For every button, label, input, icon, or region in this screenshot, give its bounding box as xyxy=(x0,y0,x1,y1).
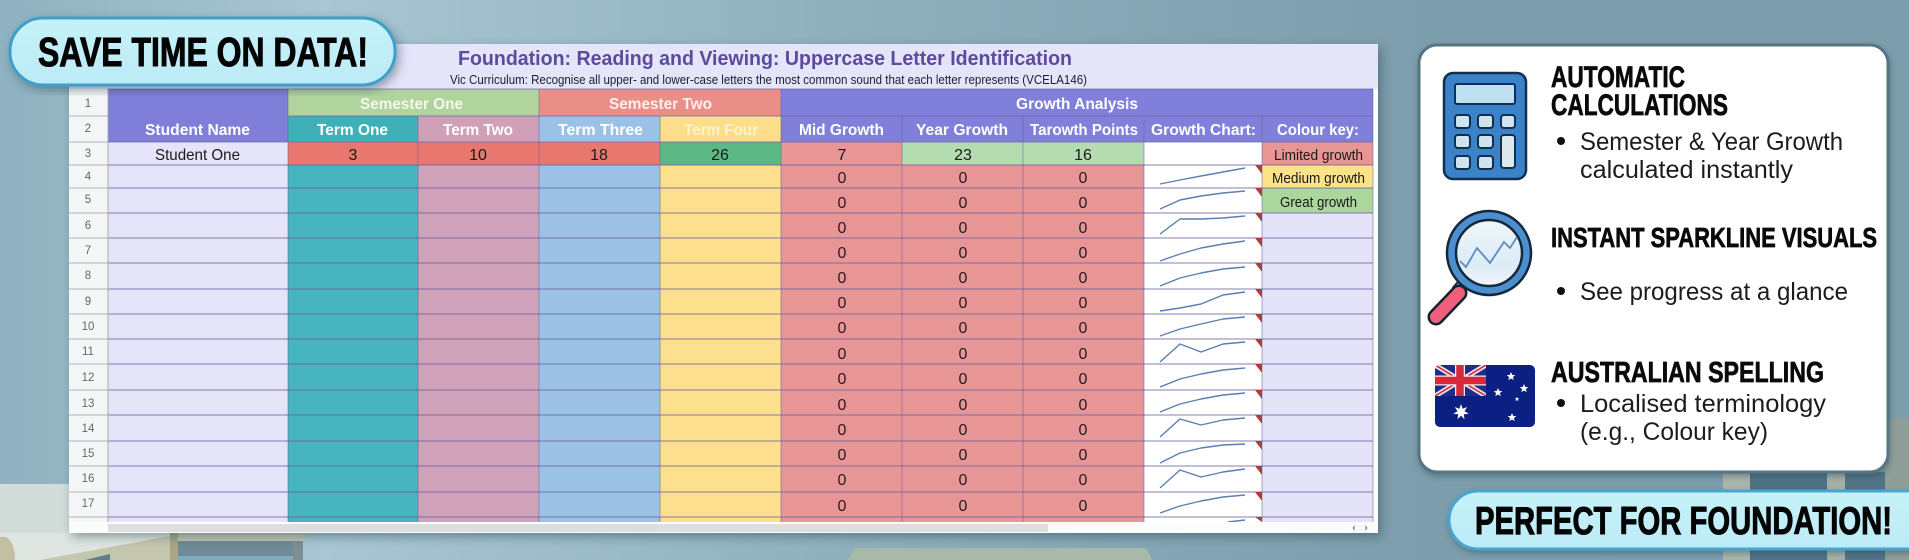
growth value zeros: 0 xyxy=(838,346,847,363)
growth value zeros: 0 xyxy=(959,220,968,237)
row number column: 4 xyxy=(85,171,92,183)
column fills xyxy=(108,142,1373,522)
sparklines column xyxy=(1160,165,1262,522)
header rows: Term Three xyxy=(558,122,643,139)
growth value zeros: 0 xyxy=(838,295,847,312)
growth value zeros: 0 xyxy=(959,422,968,439)
heading: australian spelling: AUSTRALIAN SPELLING xyxy=(1551,357,1824,389)
growth value zeros: 0 xyxy=(838,270,847,287)
growth value zeros: 0 xyxy=(838,447,847,464)
row number column: 3 xyxy=(85,148,91,160)
growth value zeros: 0 xyxy=(959,270,968,287)
row number column: 12 xyxy=(82,372,94,384)
colour key xyxy=(1262,142,1373,213)
student one data row: 26 xyxy=(711,147,729,164)
growth value zeros: 0 xyxy=(1079,498,1088,515)
growth value zeros: 0 xyxy=(838,397,847,414)
growth value zeros: 0 xyxy=(959,245,968,262)
row number column: 13 xyxy=(82,398,94,410)
callout: perfect for foundation xyxy=(1449,491,1909,549)
icon: calculator xyxy=(1444,73,1526,179)
header rows: Semester Two xyxy=(609,96,712,113)
growth value zeros: 0 xyxy=(1079,295,1088,312)
header rows xyxy=(108,89,1373,142)
growth value zeros: 0 xyxy=(959,498,968,515)
colour key: Limited growth xyxy=(1274,147,1363,164)
colour key: Great growth xyxy=(1280,194,1357,211)
growth value zeros: 0 xyxy=(959,170,968,187)
growth value zeros: 0 xyxy=(1079,270,1088,287)
bullet: semester and year growth: calculated instantly xyxy=(1580,156,1794,184)
student one data row: 16 xyxy=(1074,147,1092,164)
growth value zeros: 0 xyxy=(1079,346,1088,363)
student one data row xyxy=(155,142,1144,165)
sheet title band xyxy=(69,44,1378,89)
feature: instant sparkline visuals xyxy=(1551,222,1877,306)
panel: features xyxy=(1419,45,1888,472)
growth value zeros: 0 xyxy=(838,245,847,262)
growth value zeros: 0 xyxy=(838,472,847,489)
callout: save time on data xyxy=(10,18,395,85)
growth value zeros: 0 xyxy=(1079,245,1088,262)
growth value zeros: 0 xyxy=(838,220,847,237)
student one data row: 10 xyxy=(469,147,487,164)
header rows: Growth Chart: xyxy=(1151,122,1256,139)
header rows: Student Name xyxy=(145,122,250,139)
growth value zeros: 0 xyxy=(959,371,968,388)
growth value zeros: 0 xyxy=(959,447,968,464)
row number column: 14 xyxy=(82,423,95,435)
growth value zeros: 0 xyxy=(1079,371,1088,388)
growth value zeros: 0 xyxy=(1079,195,1088,212)
student one data row: 23 xyxy=(954,147,972,164)
header rows: Tarowth Points xyxy=(1030,122,1138,139)
row number column: 8 xyxy=(85,270,91,282)
growth value zeros: 0 xyxy=(1079,422,1088,439)
row number column: 10 xyxy=(82,321,94,333)
heading: automatic calculations: AUTOMATIC xyxy=(1551,61,1685,94)
header rows: Term Two xyxy=(443,122,513,139)
row number column: 17 xyxy=(82,498,94,510)
growth value zeros: 0 xyxy=(838,498,847,515)
icon: magnifying glass xyxy=(1436,211,1531,317)
row number column: 16 xyxy=(82,473,94,485)
growth value zeros: 0 xyxy=(1079,472,1088,489)
student one data row: 3 xyxy=(349,147,358,164)
row number column xyxy=(69,89,109,522)
student one data row: 7 xyxy=(838,147,847,164)
row number column: 1 xyxy=(85,98,91,110)
growth value zeros: 0 xyxy=(838,422,847,439)
row number column: 6 xyxy=(85,220,91,232)
icon: australian flag xyxy=(1435,365,1535,427)
student one data row: Student One xyxy=(155,147,240,164)
bullet: localised terminology: (e.g., Colour key) xyxy=(1580,418,1768,446)
growth value zeros: 0 xyxy=(959,346,968,363)
row number column: 9 xyxy=(85,296,91,308)
header rows: Year Growth xyxy=(916,122,1008,139)
header rows: Mid Growth xyxy=(799,122,884,139)
bullet: localised terminology xyxy=(1557,390,1827,446)
growth value zeros: 0 xyxy=(1079,170,1088,187)
heading: automatic calculations xyxy=(1551,61,1728,122)
row number column: 7 xyxy=(85,245,91,257)
growth value zeros: 0 xyxy=(1079,447,1088,464)
growth value zeros: 0 xyxy=(1079,397,1088,414)
growth value zeros: 0 xyxy=(959,320,968,337)
growth value zeros: 0 xyxy=(959,472,968,489)
header rows: Semester One xyxy=(360,96,463,113)
sheet title: Foundation: Reading and Viewing: Uppercase Letter Identification xyxy=(458,47,1072,70)
growth value zeros: 0 xyxy=(838,371,847,388)
feature: automatic calculations xyxy=(1551,61,1843,184)
growth value zeros xyxy=(838,170,1088,515)
growth value zeros: 0 xyxy=(959,195,968,212)
growth value zeros: 0 xyxy=(838,320,847,337)
header rows: Term Four xyxy=(684,122,758,139)
growth value zeros: 0 xyxy=(959,397,968,414)
heading: automatic calculations: CALCULATIONS xyxy=(1551,89,1728,122)
header rows: Growth Analysis xyxy=(1016,96,1138,113)
bullet: semester and year growth: Semester & Year Growth xyxy=(1580,128,1843,156)
growth value zeros: 0 xyxy=(1079,320,1088,337)
header rows: Term One xyxy=(317,122,388,139)
growth value zeros: 0 xyxy=(838,170,847,187)
bullet: semester and year growth xyxy=(1557,128,1843,184)
grid lines xyxy=(69,89,1373,522)
bullet: see progress: See progress at a glance xyxy=(1580,278,1848,306)
growth value zeros: 0 xyxy=(1079,220,1088,237)
growth value zeros: 0 xyxy=(959,295,968,312)
row number column: 2 xyxy=(85,123,91,135)
row number column: 5 xyxy=(85,194,91,206)
curriculum subtitle: Vic Curriculum: Recognise all upper- and lower-case letters the most common sound that each letter represents (VCELA146) xyxy=(450,73,1087,87)
row number column: 15 xyxy=(82,448,94,460)
colour key: Medium growth xyxy=(1272,170,1365,187)
scrollbar xyxy=(69,522,1378,533)
row number column: 11 xyxy=(82,346,94,358)
growth value zeros: 0 xyxy=(838,195,847,212)
spreadsheet panel xyxy=(69,44,1378,533)
callout: save time on data: SAVE TIME ON DATA! xyxy=(38,29,368,75)
header rows: Colour key: xyxy=(1277,122,1359,139)
feature: australian spelling xyxy=(1551,357,1827,446)
student one data row: 18 xyxy=(590,147,608,164)
bullet: localised terminology: Localised terminology xyxy=(1580,390,1827,418)
